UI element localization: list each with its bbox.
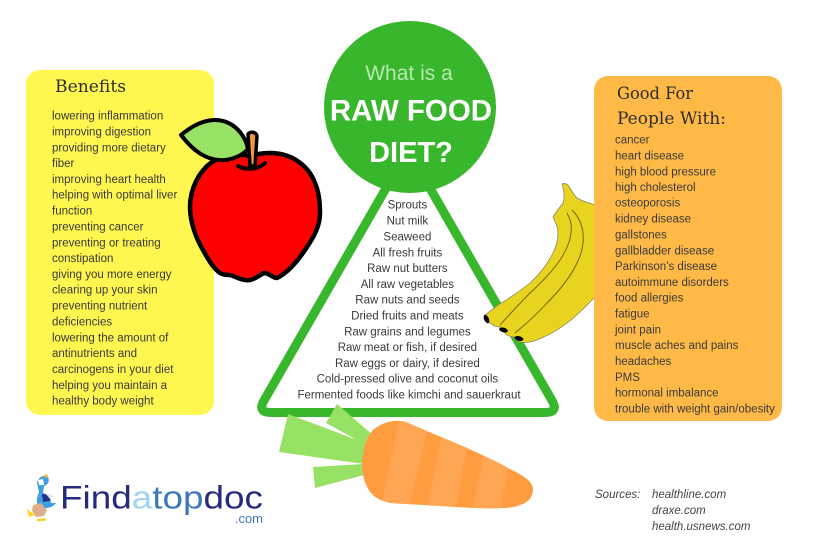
panel: good for [594, 76, 782, 421]
list: conditions: trouble with weight gain/obesity [615, 404, 775, 416]
list: benefits: deficiencies [52, 316, 112, 328]
apple dimple [238, 163, 265, 169]
list: conditions: gallstones [615, 230, 667, 242]
sources: Sources: [595, 489, 640, 501]
list: benefits: healthy body weight [52, 396, 154, 408]
pyramid food list: Seaweed [383, 232, 431, 244]
list: conditions: high cholesterol [615, 182, 696, 194]
icon: apple [181, 120, 320, 280]
pyramid food list: Raw grains and legumes [344, 326, 471, 338]
list: conditions: kidney disease [615, 214, 691, 226]
title line 3: DIET? [369, 137, 453, 169]
list: benefits: constipation [52, 253, 113, 265]
logo .com: .com [235, 511, 263, 526]
list: benefits: preventing cancer [52, 222, 144, 234]
list: benefits: antinutrients and [52, 348, 137, 360]
pyramid food list: Fermented foods like kimchi and sauerkraut [297, 390, 521, 402]
panel: benefits [26, 70, 214, 415]
list: benefits: fiber [52, 158, 75, 170]
pyramid food list: All raw vegetables [361, 279, 454, 291]
logo: findatopdoc [27, 474, 263, 526]
list: benefits: improving heart health [52, 174, 166, 186]
carrot body [362, 421, 533, 508]
list: conditions: headaches [615, 356, 672, 368]
source links: draxe.com [652, 505, 706, 517]
pyramid food list: All fresh fruits [373, 248, 442, 260]
list: benefits: giving you more energy [52, 269, 172, 281]
list: conditions: food allergies [615, 292, 684, 304]
icon: duck mascot [27, 474, 56, 521]
list: conditions: joint pain [614, 324, 661, 336]
pyramid food list: Sprouts [388, 200, 427, 212]
apple leaf [181, 120, 248, 160]
list: benefits: helping you maintain a [52, 380, 168, 392]
list: benefits: helping with optimal liver [52, 190, 177, 202]
list: benefits: lowering the amount of [52, 332, 169, 344]
list: benefits: preventing or treating [52, 238, 161, 250]
list: benefits: lowering inflammation [52, 110, 163, 122]
list: conditions: heart disease [615, 150, 684, 162]
list: conditions: gallbladder disease [615, 246, 714, 258]
heading: good for [617, 84, 726, 129]
list: benefits: function [52, 206, 92, 218]
list: benefits: clearing up your skin [52, 284, 157, 296]
apple stem [248, 132, 257, 166]
banana ridges [500, 210, 583, 333]
pyramid food list: Dried fruits and meats [351, 310, 464, 322]
pyramid food list: Raw eggs or dairy, if desired [335, 358, 480, 370]
list: conditions: hormonal imbalance [615, 388, 719, 400]
list: conditions: fatigue [615, 308, 650, 320]
pyramid food list: Nut milk [387, 216, 428, 228]
icon: banana [483, 184, 596, 342]
heading: good for: People With: [617, 109, 726, 129]
pyramid food list: Raw nut butters [367, 263, 448, 275]
title line 1: What is a [365, 62, 453, 85]
list: conditions: high blood pressure [615, 166, 716, 178]
banana tips [483, 314, 524, 342]
logo wordmark: Find atopdoc [60, 480, 263, 516]
heading: benefits: Benefits [55, 77, 126, 97]
list: conditions: osteoporosis [615, 198, 680, 210]
pyramid food list: Cold-pressed olive and coconut oils [317, 374, 498, 386]
list: conditions: PMS [615, 372, 640, 384]
carrot greens [279, 404, 374, 488]
pyramid food list: Raw nuts and seeds [355, 294, 460, 306]
pyramid food list: Raw meat or fish, if desired [338, 342, 477, 354]
source links: healthline.com [652, 489, 727, 501]
list: benefits: providing more dietary [52, 142, 166, 154]
list: conditions: Parkinson’s disease [615, 261, 717, 273]
list: conditions: autoimmune disorders [615, 277, 729, 289]
list: benefits: preventing nutrient [52, 300, 148, 312]
list: conditions: cancer [615, 134, 650, 146]
icon: carrot [279, 404, 533, 510]
source links: health.usnews.com [652, 521, 751, 533]
title line 2: RAW FOOD [330, 94, 492, 128]
circle title [324, 21, 496, 193]
pyramid triangle outline [262, 150, 554, 412]
sources [595, 489, 751, 533]
list: benefits: carcinogens in your diet [52, 364, 174, 376]
heading: good for: Good For [617, 84, 694, 104]
list: benefits: improving digestion [52, 126, 151, 138]
list: conditions: muscle aches and pains [615, 340, 739, 352]
carrot stripes [382, 418, 509, 510]
